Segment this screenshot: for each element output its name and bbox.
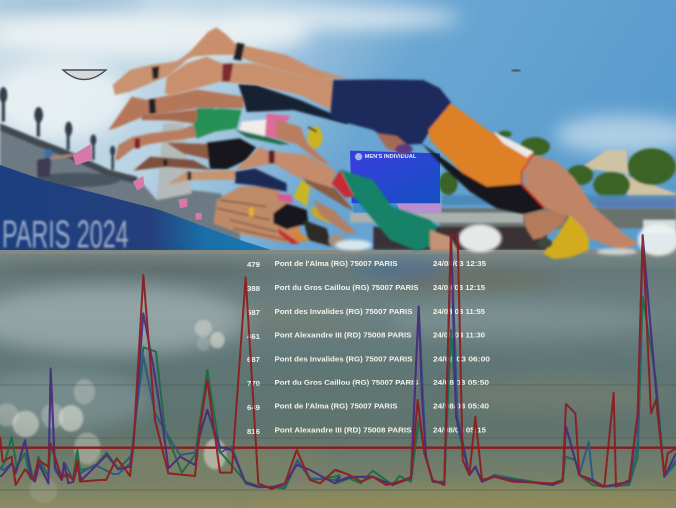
row 6: 770 xyxy=(247,379,260,388)
blue banner: Paris 2024 xyxy=(0,165,273,257)
swimmer: top rear leg xyxy=(173,27,347,79)
row 6: Port du Gros Caillou (RG) 75007 PARIS xyxy=(274,378,419,387)
row 8: 816 xyxy=(247,427,260,436)
swimmer: orange and navy suit, main diver xyxy=(165,57,638,259)
background: trees, buildings and far bank xyxy=(350,131,676,250)
main diver orange panel xyxy=(428,103,534,187)
screen text: MEN'S INDIVIDUAL xyxy=(365,154,417,160)
threshold line xyxy=(0,447,676,449)
row 3: 24/08/03 11:55 xyxy=(433,307,485,316)
distant drone xyxy=(511,69,521,72)
row 2: 24/08/03 12:15 xyxy=(433,283,485,292)
line chart: E. coli readings at four sites xyxy=(0,235,676,490)
main diver navy shorts xyxy=(330,79,452,145)
row 8: Pont Alexandre III (RD) 75008 PARIS xyxy=(274,426,412,434)
row 5: 24/08/03 06:00 xyxy=(433,354,490,364)
row 2 xyxy=(247,283,485,293)
row 5: Pont des Invalides (RG) 75007 PARIS xyxy=(274,354,413,364)
main diver shoulder and arm xyxy=(523,155,638,251)
swimmer: dark suit second row xyxy=(108,60,350,130)
banner text: PARIS 2024 xyxy=(2,213,129,257)
sky background xyxy=(0,0,676,260)
row 6: 24/08/03 05:50 xyxy=(433,378,489,387)
pink flags xyxy=(73,144,202,220)
row 5: 687 xyxy=(247,355,260,364)
swimmer: green and red suit, foreground xyxy=(237,147,458,251)
row 4 xyxy=(247,330,485,341)
river water surface xyxy=(0,250,676,508)
left bridge with lamps xyxy=(0,87,240,247)
row 7: Pont de l'Alma (RG) 75007 PARIS xyxy=(274,402,398,410)
rear swimmer hand xyxy=(377,133,413,155)
row 3: 687 xyxy=(247,308,260,317)
screen logo xyxy=(355,153,362,160)
water splashes xyxy=(335,224,676,256)
icon: floating arc logo xyxy=(63,70,106,80)
swimmer: green and pink suit xyxy=(115,108,331,165)
main diver yellow cap xyxy=(543,215,589,259)
main diver face xyxy=(523,210,567,240)
row 7: 24/08/03 05:40 xyxy=(433,402,489,410)
row 1 xyxy=(247,259,486,269)
row 6 xyxy=(247,378,489,388)
data table: bridge readings xyxy=(247,259,490,436)
row 4: 461 xyxy=(247,332,260,341)
row 7 xyxy=(247,402,489,412)
row 1: 479 xyxy=(247,260,260,269)
main diver white trim xyxy=(493,132,534,157)
row 2: 388 xyxy=(247,284,260,293)
bokeh highlights on the water xyxy=(0,320,226,503)
row 1: 24/08/03 12:35 xyxy=(433,259,486,268)
row 1: Pont de l'Alma (RG) 75007 PARIS xyxy=(274,259,398,268)
row 4: Pont Alexandre III (RD) 75008 PARIS xyxy=(274,330,412,340)
row 4: 24/08/03 11:30 xyxy=(433,330,485,340)
row 7: 649 xyxy=(247,403,260,412)
main diver lower black panel xyxy=(422,143,546,214)
big screen: men's individual xyxy=(350,151,442,213)
crowd of rear swimmers xyxy=(213,180,357,247)
row 5 xyxy=(247,354,490,364)
swimmer: black suit xyxy=(133,138,256,171)
swimmer: navy suit low xyxy=(168,168,354,211)
main diver goggles xyxy=(538,238,552,248)
main diver leg xyxy=(165,57,335,111)
row 8 xyxy=(247,426,486,436)
row 3: Pont des Invalides (RG) 75007 PARIS xyxy=(274,307,413,316)
row 3 xyxy=(247,307,485,317)
row 8: 24/08/03 05:15 xyxy=(433,426,486,434)
row 2: Port du Gros Caillou (RG) 75007 PARIS xyxy=(274,283,419,292)
